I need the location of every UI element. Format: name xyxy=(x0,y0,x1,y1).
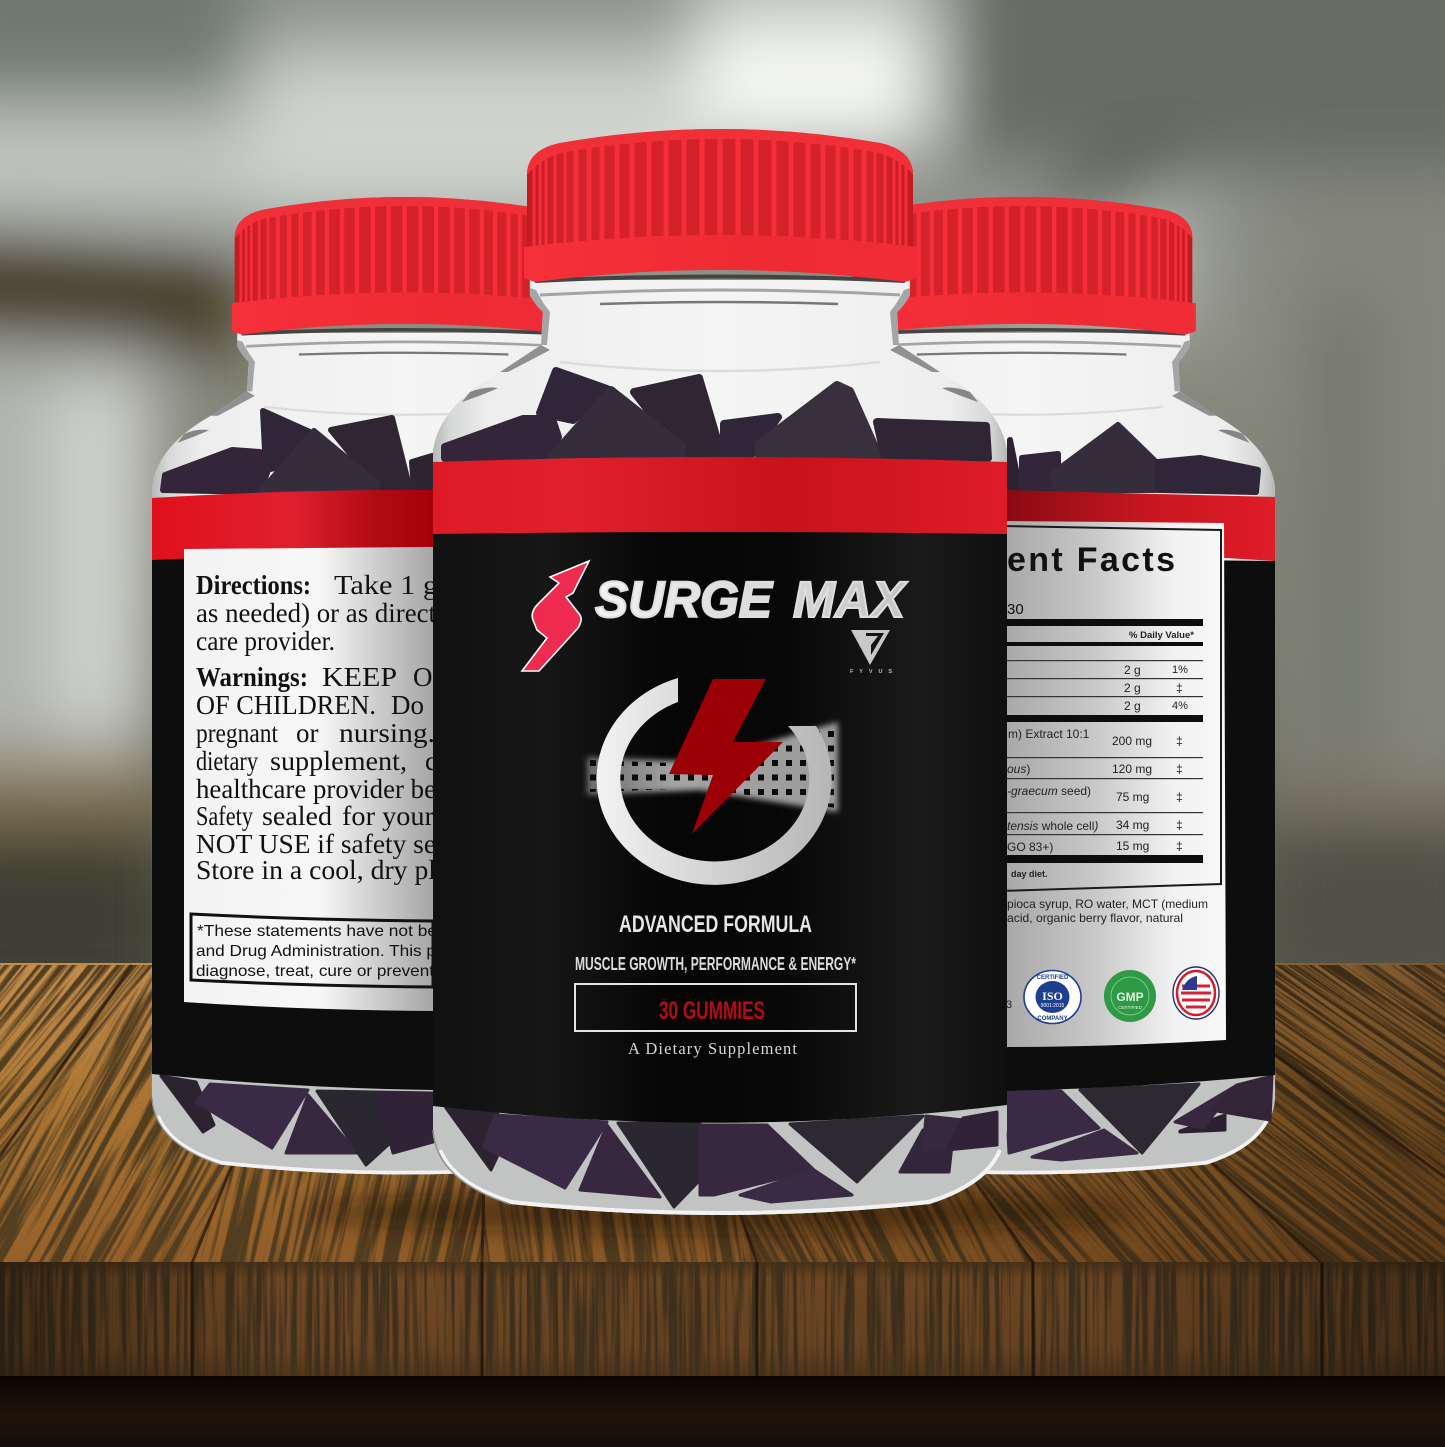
count box xyxy=(575,984,856,1031)
warnings paragraph: c xyxy=(425,746,437,776)
table text: -graecum seed) xyxy=(1007,784,1091,798)
table text: 15 mg xyxy=(1116,839,1149,853)
right red band xyxy=(1000,490,1275,561)
table text: ‡ xyxy=(1176,839,1183,853)
directions paragraph: Take 1 g xyxy=(334,570,438,600)
table text xyxy=(1007,630,1194,879)
table text: ‡ xyxy=(1176,734,1183,748)
table text: 34 mg xyxy=(1116,818,1149,832)
bottle shadow on table xyxy=(300,1190,1140,1234)
badge: USA flag xyxy=(1173,967,1219,1019)
left bottle xyxy=(151,197,543,1174)
table rules xyxy=(1000,619,1203,863)
center black label xyxy=(433,532,1007,1123)
disclaimer box xyxy=(191,914,437,987)
blurred room background xyxy=(0,0,1445,1005)
center bottle xyxy=(433,125,1007,1215)
warnings paragraph: Safety xyxy=(196,801,253,831)
table text: m) Extract 10:1 xyxy=(1008,727,1090,741)
left label text xyxy=(191,570,438,987)
ingredients text: acid, organic berry flavor, natural xyxy=(1007,911,1183,925)
table text: % Daily Value* xyxy=(1129,630,1194,641)
table text: 2 g xyxy=(1124,663,1141,677)
ingredients text: 3 xyxy=(1006,999,1012,1011)
warnings paragraph: Warnings: xyxy=(196,662,308,692)
brand name: SURGE xyxy=(595,571,774,628)
count box: 30 GUMMIES xyxy=(659,997,765,1025)
right bottle gummies bottom xyxy=(1006,1076,1272,1160)
warnings paragraph: OF CHILDREN. xyxy=(196,690,376,720)
warnings paragraph: dietary xyxy=(196,746,258,776)
lightning bolt xyxy=(669,679,783,834)
left black label xyxy=(152,548,433,1090)
disclaimer box: *These statements have not be xyxy=(197,923,437,940)
table text: ‡ xyxy=(1176,790,1183,804)
badge: ISO certified: ISO xyxy=(1042,989,1063,1003)
warnings paragraph: healthcare provider be xyxy=(196,774,436,804)
table text: GO 83+) xyxy=(1007,840,1053,854)
table text: 1% xyxy=(1172,664,1188,676)
badge: GMP certified xyxy=(1104,970,1156,1022)
product claim: MUSCLE GROWTH, PERFORMANCE & ENERGY* xyxy=(575,954,856,974)
table text: ‡ xyxy=(1176,681,1183,695)
table text: 2 g xyxy=(1124,681,1141,695)
brand logo xyxy=(522,561,908,671)
ingredients text: pioca syrup, RO water, MCT (medium xyxy=(1007,897,1208,911)
badge: ISO certified: COMPANY xyxy=(1037,1016,1068,1022)
badge: ISO certified: 9001:2015 xyxy=(1041,1003,1065,1009)
warnings paragraph: for your xyxy=(342,801,434,831)
advanced formula: ADVANCED FORMULA xyxy=(619,911,812,938)
warnings paragraph: Do xyxy=(391,690,424,720)
center red band xyxy=(433,457,1007,536)
left bottle glass and cap xyxy=(152,193,657,1174)
center bottle glass and cap xyxy=(433,125,1007,1215)
servings: 30 xyxy=(1007,601,1024,618)
left bottle gummies top xyxy=(163,411,432,492)
center bottle gummies bottom xyxy=(446,1108,997,1207)
directions paragraph: as needed) or as direct xyxy=(196,598,436,628)
table text: ‡ xyxy=(1176,818,1183,832)
warnings paragraph: supplement, xyxy=(270,746,407,776)
warnings paragraph: O xyxy=(413,662,432,692)
FYVUS mark: FYVUS xyxy=(850,669,892,675)
directions paragraph: care provider. xyxy=(196,626,335,656)
warnings paragraph: NOT USE if safety se xyxy=(196,829,436,859)
power ring xyxy=(597,678,832,885)
warnings paragraph: Store in a cool, dry pl xyxy=(196,855,436,885)
plank seams on table top xyxy=(0,965,1445,1263)
center bottle gummies top xyxy=(445,371,988,458)
wooden table front edge xyxy=(0,1262,1445,1447)
ingredients text xyxy=(1006,897,1208,1011)
warnings paragraph: or xyxy=(296,718,318,748)
badge: GMP certified: CERTIFIED xyxy=(1118,1005,1143,1010)
logo mark xyxy=(522,561,589,671)
disclaimer box: and Drug Administration. This p xyxy=(196,943,436,960)
dietary supplement line: A Dietary Supplement xyxy=(628,1039,797,1058)
wooden table top xyxy=(0,963,1445,1263)
right bottle glass and cap xyxy=(770,193,1275,1174)
warnings paragraph xyxy=(196,662,437,885)
right bottle gummies top xyxy=(1010,425,1258,492)
table text: 75 mg xyxy=(1116,790,1149,804)
left red band xyxy=(152,490,433,560)
facts heading: ent Facts xyxy=(1007,541,1175,579)
directions paragraph xyxy=(196,570,438,656)
warnings paragraph: sealed xyxy=(262,801,333,831)
table text: 120 mg xyxy=(1112,762,1152,776)
left bottle gummies bottom xyxy=(161,1076,433,1165)
perforated band xyxy=(587,722,838,812)
brand name: MAX xyxy=(793,571,908,628)
directions paragraph: Directions: xyxy=(196,570,311,600)
facts frame xyxy=(1000,526,1221,891)
table text: 2 g xyxy=(1124,699,1141,713)
warnings paragraph: nursing. xyxy=(339,718,435,748)
brand name xyxy=(595,571,908,628)
table text: 200 mg xyxy=(1112,734,1152,748)
table text: tensis whole cell) xyxy=(1007,819,1098,833)
power ring emblem xyxy=(587,678,839,885)
badge: GMP certified: GMP xyxy=(1116,990,1144,1004)
right bottle xyxy=(852,197,1276,1174)
badge: ISO certified xyxy=(1024,970,1081,1024)
disclaimer box: diagnose, treat, cure or prevent xyxy=(196,963,435,980)
table text: ‡ xyxy=(1176,762,1183,776)
warnings paragraph: KEEP xyxy=(322,662,397,692)
table text: day diet. xyxy=(1011,869,1048,879)
warnings paragraph: pregnant xyxy=(196,718,278,748)
right black label xyxy=(1000,558,1275,1091)
left directions paper xyxy=(184,547,433,1011)
table text: 4% xyxy=(1172,700,1188,712)
badge: ISO certified: CERTIFIED xyxy=(1037,975,1069,981)
right facts paper xyxy=(1000,521,1226,1047)
table text: ous) xyxy=(1007,762,1030,776)
FYVUS mark xyxy=(850,630,892,675)
right label content xyxy=(1000,526,1221,1011)
